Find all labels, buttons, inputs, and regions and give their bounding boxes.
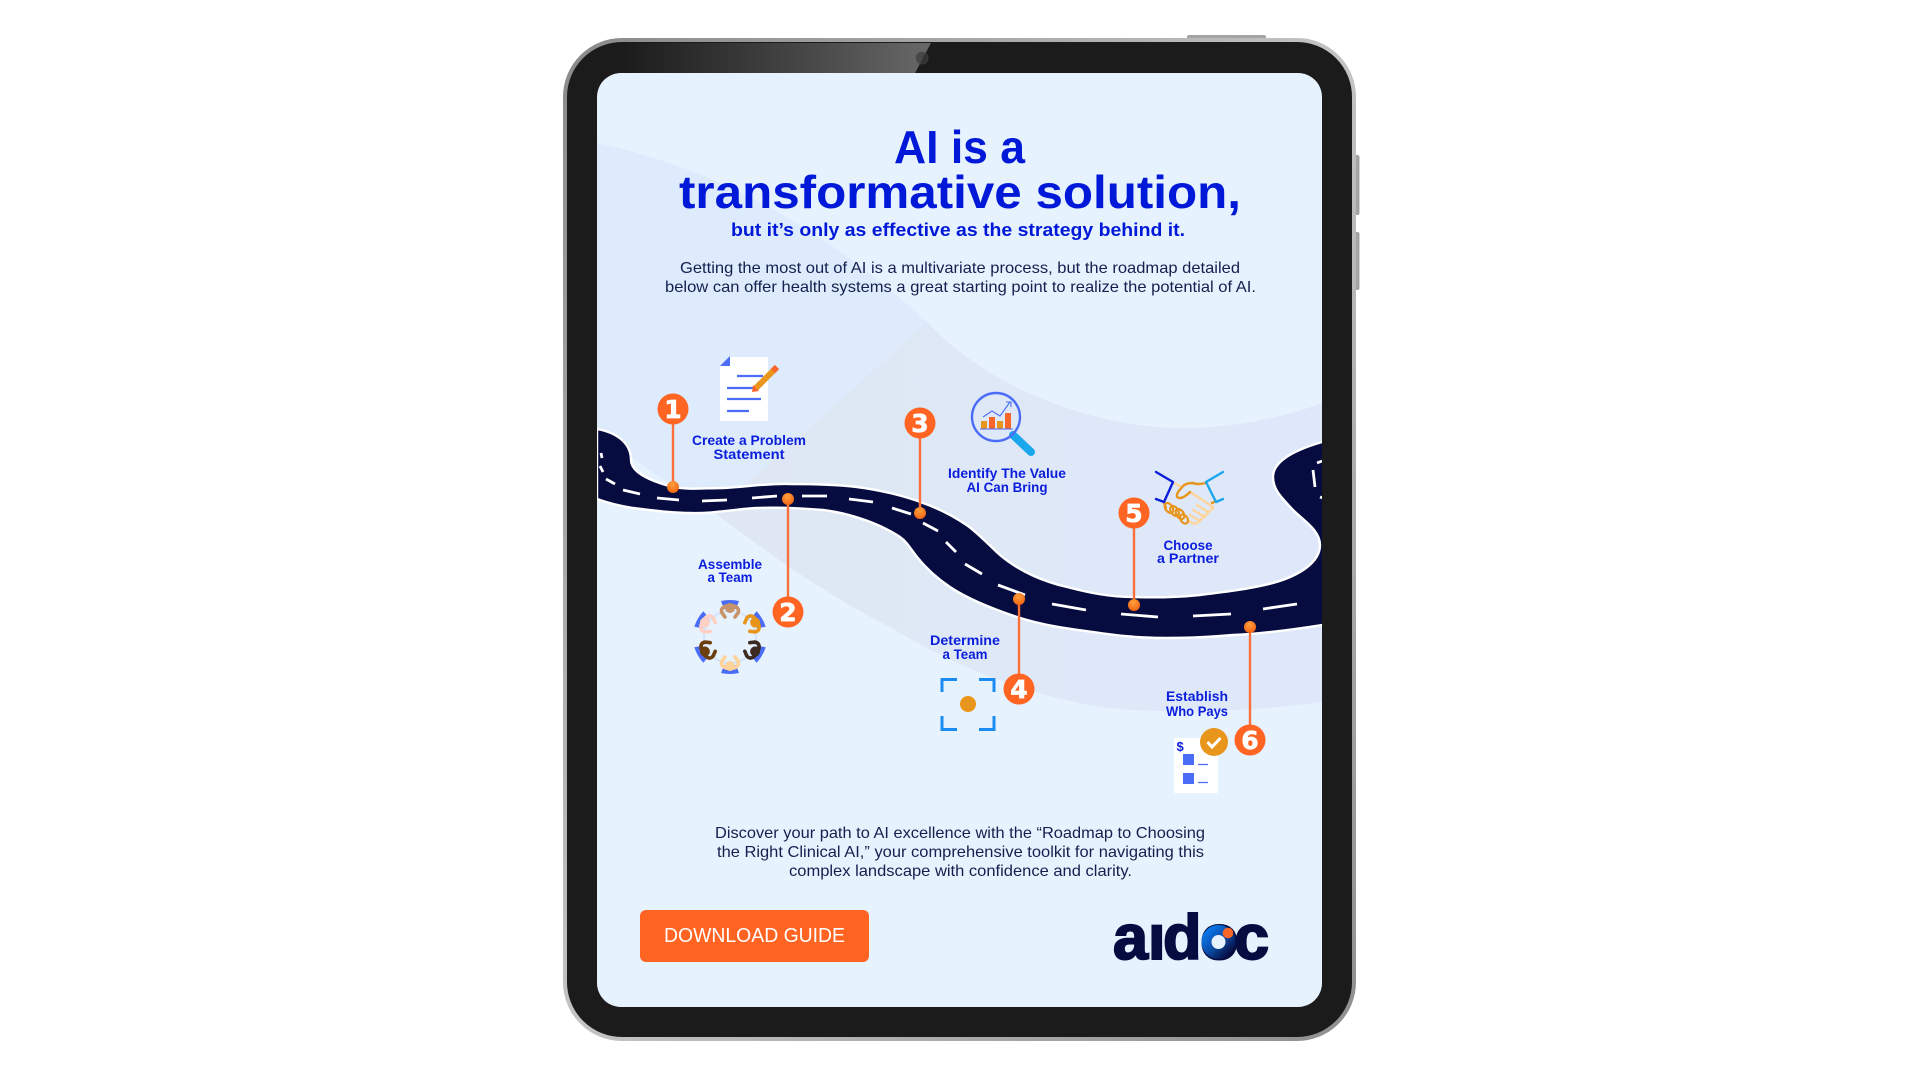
tablet infographic	[563, 35, 1360, 1041]
pin 3: 3	[911, 409, 929, 438]
road surface	[597, 429, 1330, 638]
pin 5: 5	[1125, 499, 1143, 528]
pin 2: 2	[779, 598, 797, 627]
step 3: identify the value	[904, 393, 1066, 519]
label: Establish	[1166, 688, 1228, 704]
label	[948, 465, 1066, 495]
label: Assemble	[698, 556, 762, 572]
tablet bezel	[565, 40, 1354, 1039]
label	[698, 556, 762, 585]
icon: payment checklist: $	[1176, 739, 1184, 754]
tablet device	[565, 35, 1360, 1039]
label: a Partner	[1157, 550, 1220, 566]
screen	[597, 73, 1330, 1007]
icon: document with pencil	[720, 356, 777, 421]
title	[679, 121, 1241, 218]
label	[1166, 688, 1228, 719]
subtitle: but it’s only as effective as the strategy behind it.	[731, 220, 1185, 240]
label: Determine	[930, 632, 1000, 648]
screen background	[597, 73, 1322, 1007]
step 4: determine a team	[930, 593, 1034, 730]
pin 1	[658, 394, 688, 493]
closing paragraph: the Right Clinical AI,” your comprehensive toolkit for navigating this	[717, 844, 1204, 861]
icon: handshake	[1156, 472, 1223, 525]
icon: magnifier with chart	[972, 393, 1031, 452]
icon: payment checklist	[1174, 728, 1228, 793]
intro paragraph	[665, 260, 1256, 296]
label	[930, 632, 1000, 662]
step 2: assemble a team	[693, 493, 804, 674]
step 1: create a problem statement	[658, 356, 806, 493]
road	[597, 429, 1330, 638]
closing paragraph: Discover your path to AI excellence with the “Roadmap to Choosing	[715, 825, 1205, 842]
title: transformative solution,	[679, 166, 1241, 218]
pin 6	[1234, 621, 1266, 756]
label: a Team	[708, 569, 752, 585]
title: AI is a	[894, 121, 1025, 173]
aidoc logo: aıdoc	[1113, 903, 1269, 973]
pin 2	[772, 493, 804, 628]
icon: target frame	[942, 680, 994, 730]
pin 3	[904, 408, 936, 519]
bezel glare	[620, 43, 931, 73]
label: Statement	[714, 446, 785, 462]
label: Identify The Value	[948, 465, 1066, 481]
intro paragraph: below can offer health systems a great starting point to realize the potential of AI.	[665, 279, 1256, 296]
label: AI Can Bring	[966, 479, 1048, 495]
camera	[916, 52, 928, 64]
pin 4: 4	[1010, 675, 1028, 704]
label: a Team	[942, 646, 988, 662]
label: Choose	[1164, 537, 1213, 553]
intro paragraph: Getting the most out of AI is a multivariate process, but the roadmap detailed	[680, 260, 1240, 277]
closing paragraph	[715, 825, 1205, 880]
label: Create a Problem	[692, 432, 806, 448]
icon: team around a table	[693, 600, 767, 674]
download button: DOWNLOAD GUIDE	[664, 925, 845, 947]
hardware buttons	[1187, 35, 1360, 290]
road centre dashes	[600, 453, 1323, 617]
label	[692, 432, 806, 462]
step 6: establish who pays	[1166, 621, 1266, 793]
pin 6: 6	[1241, 726, 1259, 755]
background shape: grey band	[715, 322, 1322, 712]
pin 1: 1	[664, 395, 682, 424]
label: Who Pays	[1166, 703, 1228, 719]
background shape: blue wave	[597, 143, 927, 513]
step 5: choose a partner	[1118, 472, 1223, 611]
label	[1157, 537, 1220, 566]
download button	[640, 910, 869, 962]
closing paragraph: complex landscape with confidence and clarity.	[789, 863, 1132, 880]
